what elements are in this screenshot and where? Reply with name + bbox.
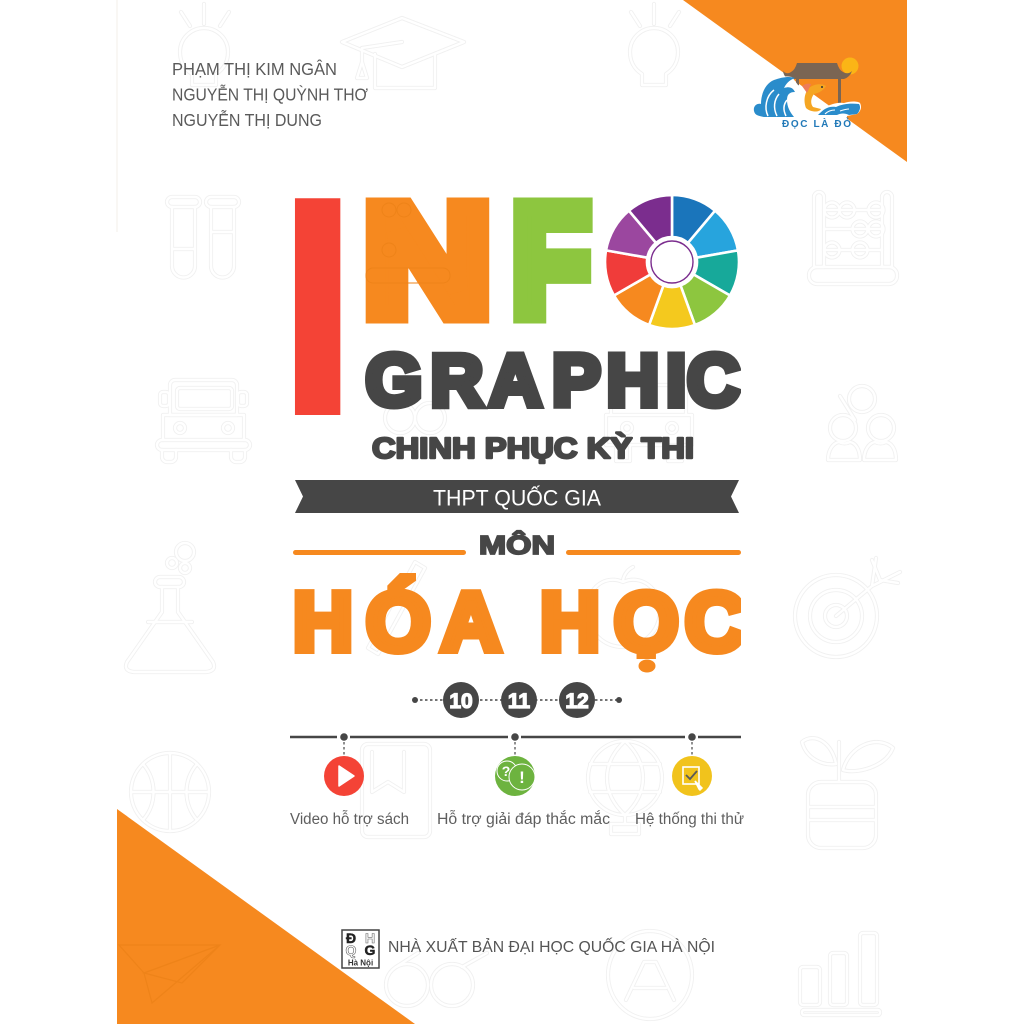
icon: gate — [783, 63, 852, 106]
subject label with rules — [293, 530, 741, 560]
authors: NGUYỄN THỊ QUỲNH THƠ — [172, 84, 368, 104]
icon: waves — [753, 76, 861, 123]
icon: checked box — [672, 756, 712, 796]
bottom left orange triangle — [117, 809, 415, 1024]
icon: carp — [802, 84, 826, 112]
publisher logo: doc la do — [753, 58, 861, 130]
faint abacus on N — [366, 203, 450, 283]
publisher logo: Q — [346, 942, 357, 958]
icon: question bubbles: ? — [502, 763, 510, 779]
letter F: F — [512, 174, 590, 348]
grade 10 — [443, 682, 479, 718]
subtitle: CHINH PHỤC KỲ THI — [372, 431, 694, 465]
book cover — [116, 0, 907, 1024]
grade 11: 11 — [508, 690, 530, 713]
grades timeline — [412, 682, 622, 718]
feature: mock test — [635, 756, 744, 828]
publisher logo: Hà Nội — [348, 958, 373, 968]
title: INFO — [274, 130, 748, 482]
publisher logo: Đ — [346, 930, 356, 946]
grade 10: 10 — [449, 690, 473, 713]
grade 11 — [501, 682, 537, 718]
subject label with rules: MÔN — [479, 530, 555, 560]
publisher name: NHÀ XUẤT BẢN ĐẠI HỌC QUỐC GIA HÀ NỘI — [388, 936, 715, 956]
logo wordmark: ĐỌC LÀ ĐỎ — [782, 117, 851, 130]
icon: question bubbles: ! — [519, 768, 525, 787]
feature: support — [437, 756, 610, 828]
authors — [172, 59, 368, 130]
grade 12: 12 — [565, 690, 589, 713]
feature: support: Hỗ trợ giải đáp thắc mắc — [437, 811, 610, 828]
subject title: HỌC — [540, 575, 745, 668]
authors: PHẠM THỊ KIM NGÂN — [172, 59, 337, 79]
ribbon banner — [295, 480, 739, 513]
publisher logo: G — [365, 942, 376, 958]
features line — [290, 733, 741, 757]
feature: video: Video hỗ trợ sách — [290, 811, 409, 828]
title: GRAPHIC: GRAPHIC — [366, 340, 740, 422]
faint background icons — [126, 4, 900, 1019]
feature: mock test: Hệ thống thi thử — [635, 811, 744, 828]
publisher logo — [342, 930, 379, 968]
feature: video — [290, 756, 409, 828]
icon: sun — [842, 58, 858, 74]
top right orange triangle — [683, 0, 907, 162]
grade 12 — [559, 682, 595, 718]
subject title: HÓA — [293, 575, 499, 668]
icon: play — [324, 756, 364, 796]
faint paper plane on triangle — [119, 945, 220, 1003]
authors: NGUYỄN THỊ DUNG — [172, 109, 322, 130]
colour wheel letter O — [592, 183, 748, 340]
icon: question bubbles — [495, 756, 535, 796]
letter I: I — [274, 130, 361, 482]
subject title — [293, 575, 745, 675]
ribbon banner: THPT QUỐC GIA — [433, 484, 601, 510]
publisher logo: H — [365, 930, 375, 946]
letter N: N — [364, 174, 491, 348]
